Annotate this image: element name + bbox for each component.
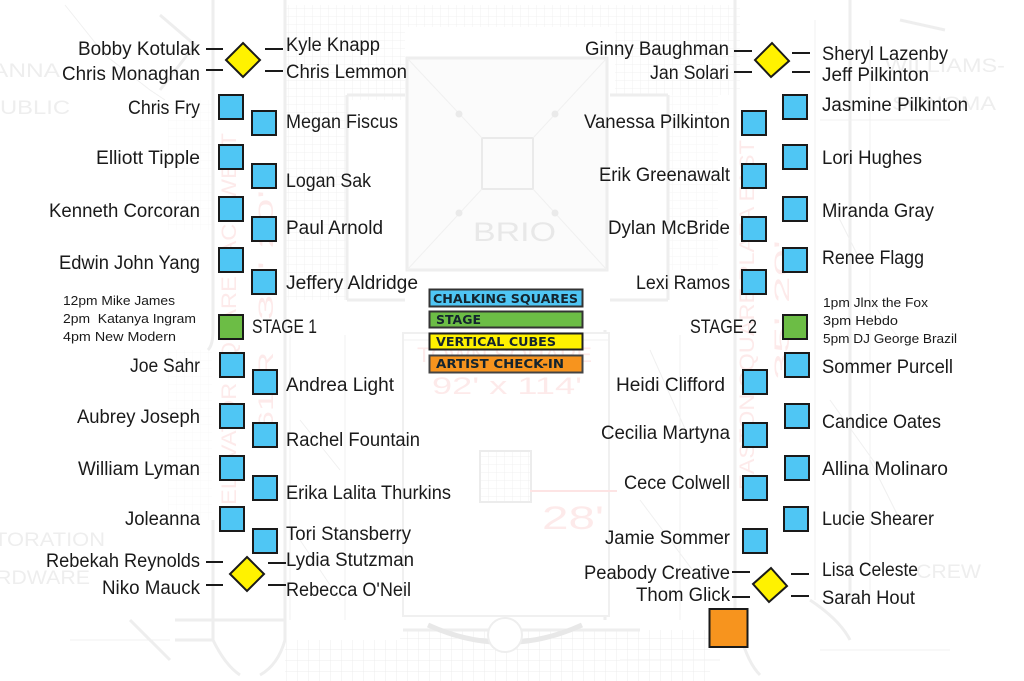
right column: chalking squares, upper <box>584 95 968 294</box>
left column: bottom cube group <box>46 550 414 601</box>
left column: chalking squares, lower: Rachel Fountain <box>286 430 420 451</box>
background: neighbouring store names: SONOMA <box>892 94 996 115</box>
right column: chalking squares, upper: Lexi Ramos <box>636 273 730 294</box>
background: neighbouring store names: CREW <box>916 562 981 583</box>
background: Brio building <box>407 58 607 270</box>
right column: chalking squares, upper: Vanessa Pilkinton <box>584 112 730 133</box>
background: pink street dimensions: EASTON SQUARE PLAZA EAST <box>736 140 759 490</box>
background: pink street dimensions: ELEVATOR SQUARE FACE WEST <box>218 133 241 505</box>
right column: top cube group: Jeff Pilkinton <box>822 65 929 86</box>
left column: chalking squares, upper: Logan Sak <box>286 171 371 192</box>
left column: top cube group: Chris Lemmon <box>286 62 407 83</box>
right column: top cube group: Jan Solari <box>650 63 729 84</box>
right column: chalking squares, upper: Jasmine Pilkinton <box>822 95 968 116</box>
stage 1: 12pm Mike James <box>63 294 175 308</box>
left column: top cube group <box>62 35 407 85</box>
background: town square: 92' x 114' <box>432 373 582 400</box>
background: town square: 28' <box>542 500 604 536</box>
right column: bottom cube group <box>584 560 918 609</box>
background: town square <box>403 333 617 652</box>
left column: bottom cube group: Rebecca O'Neil <box>286 580 411 601</box>
background: neighbouring store names: WILLIAMS- <box>885 56 1005 77</box>
right column: chalking squares, lower: Heidi Clifford <box>616 375 725 396</box>
right column: bottom cube group: Thom Glick <box>636 585 730 606</box>
legend: stage: STAGE <box>436 312 481 327</box>
left column: top cube group: Bobby Kotulak <box>78 39 200 60</box>
legend <box>430 290 582 372</box>
stage 2: 3pm Hebdo <box>823 314 898 328</box>
right column: chalking squares, upper: Lori Hughes <box>822 148 922 169</box>
left column: bottom cube group: Lydia Stutzman <box>286 550 414 571</box>
left column: chalking squares, lower: Erika Lalita Thurkins <box>286 483 451 504</box>
right column: chalking squares, lower: Cecilia Martyna <box>601 423 730 444</box>
right column: top cube group: Ginny Baughman <box>585 39 729 60</box>
right column: chalking squares, lower: Cece Colwell <box>624 473 730 494</box>
stage 2: STAGE 2 <box>690 317 757 338</box>
background: town square: TOWN SQUARE <box>417 344 592 367</box>
background label: Brio: BRIO <box>473 217 556 247</box>
legend: chalking squares: CHALKING SQUARES <box>433 291 578 306</box>
right column: chalking squares, upper: Erik Greenawalt <box>599 165 731 186</box>
left column: chalking squares, lower <box>77 353 451 553</box>
left column: chalking squares, upper: Megan Fiscus <box>286 112 398 133</box>
stage 2: 1pm Jlnx the Fox <box>823 296 929 310</box>
legend: artist check-in: ARTIST CHECK-IN <box>436 356 564 371</box>
left column: chalking squares, upper: Elliott Tipple <box>96 148 200 169</box>
right column: chalking squares, lower: Jamie Sommer <box>605 528 731 549</box>
background: pink street dimensions <box>218 133 794 505</box>
right column: bottom cube group: Sarah Hout <box>822 588 916 609</box>
left column: chalking squares, upper: Kenneth Corcoran <box>49 201 200 222</box>
left column: bottom cube group: Rebekah Reynolds <box>46 551 200 572</box>
left column: chalking squares, upper: Jeffery Aldridge <box>286 273 418 294</box>
stage 1: 2pm Katanya Ingram <box>63 312 196 326</box>
legend: vertical cubes: VERTICAL CUBES <box>436 334 556 349</box>
right column: bottom cube group: Lisa Celeste <box>822 560 918 581</box>
left column: chalking squares, lower: Joleanna <box>125 509 200 530</box>
left column: chalking squares, upper: Chris Fry <box>128 98 200 119</box>
right column: top cube group: Sheryl Lazenby <box>822 44 948 65</box>
background: neighbouring store names <box>0 56 1005 589</box>
stage 2: 5pm DJ George Brazil <box>823 332 957 346</box>
left column: chalking squares, lower: Tori Stansberry <box>286 524 411 545</box>
left column: chalking squares, upper: Edwin John Yang <box>59 253 200 274</box>
right column: chalking squares, lower: Sommer Purcell <box>822 357 953 378</box>
right column: chalking squares, upper: Miranda Gray <box>822 201 934 222</box>
background: neighbouring store names: UBLIC <box>0 98 70 119</box>
left column: bottom cube group: Niko Mauck <box>102 578 200 599</box>
left column: chalking squares, lower: Andrea Light <box>286 375 395 396</box>
right column: chalking squares, upper: Renee Flagg <box>822 248 924 269</box>
stage 2 <box>690 296 957 346</box>
right column: bottom cube group: Peabody Creative <box>584 563 730 584</box>
stage 1: STAGE 1 <box>252 317 317 338</box>
right column: chalking squares, upper: Dylan McBride <box>608 218 730 239</box>
background: pink street dimensions: 35' 20' <box>771 240 794 380</box>
left column: top cube group: Kyle Knapp <box>286 35 380 56</box>
background: pink street dimensions: 35' 20' <box>255 190 278 320</box>
stage 1 <box>63 294 317 344</box>
left column: top cube group: Chris Monaghan <box>62 64 200 85</box>
right column: chalking squares, lower: Candice Oates <box>822 412 941 433</box>
left column: chalking squares, upper: Paul Arnold <box>286 218 383 239</box>
right column: top cube group <box>585 39 948 86</box>
left column: chalking squares, lower: William Lyman <box>78 459 200 480</box>
stage 1: 4pm New Modern <box>63 330 176 344</box>
artist check-in square <box>710 609 748 647</box>
legend: stage <box>430 312 582 328</box>
right column: chalking squares, lower: Allina Molinaro <box>822 459 948 480</box>
left column: chalking squares, upper <box>49 95 418 294</box>
right column: chalking squares, lower: Lucie Shearer <box>822 509 935 530</box>
legend: artist check-in <box>430 356 582 372</box>
background: pink street dimensions: 61' R <box>255 352 278 430</box>
left column: chalking squares, lower: Aubrey Joseph <box>77 407 200 428</box>
right column: chalking squares, lower <box>601 353 953 553</box>
left column: chalking squares, lower: Joe Sahr <box>130 356 201 377</box>
